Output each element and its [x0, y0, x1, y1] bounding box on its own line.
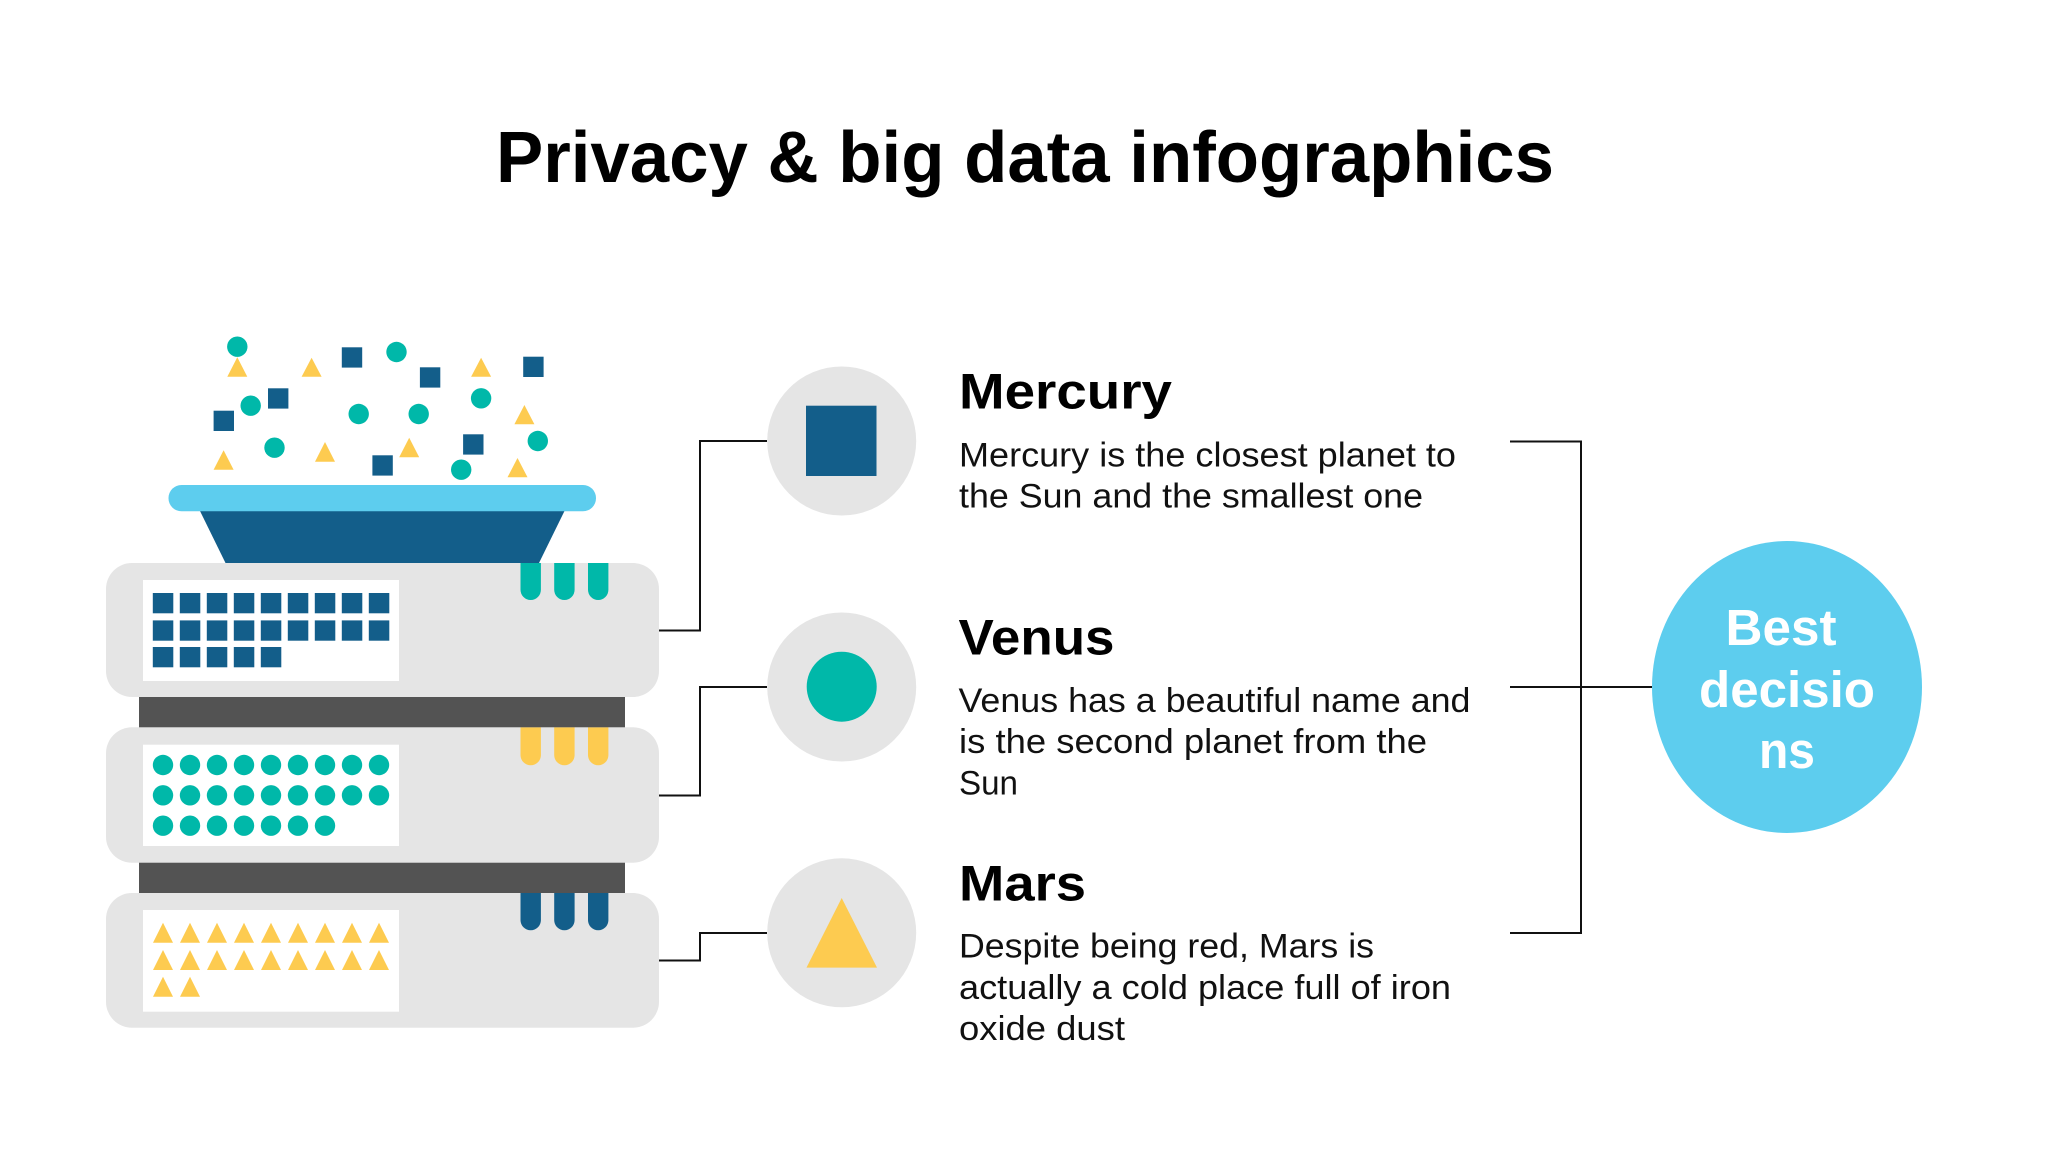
server 2 screen: [143, 745, 399, 846]
title: Privacy & big data infographics: [496, 118, 1554, 198]
text block: Mercury: [959, 364, 1456, 516]
icon: Mars triangle: [767, 858, 916, 1007]
funnel rim: [168, 485, 596, 511]
connector: server 3 to Mars: [659, 933, 767, 960]
description: Venus: Sun: [959, 764, 1018, 802]
teal circles: [227, 336, 548, 480]
connector: server 1 to Mercury: [659, 441, 767, 630]
callout: Best decisions: decisio: [1699, 661, 1875, 718]
description: Mars: [959, 928, 1451, 1048]
description: Venus: [958, 682, 1470, 802]
falling data particles: [214, 336, 548, 480]
description: Mars: Despite being red, Mars is: [959, 928, 1374, 966]
server 3 screen: [143, 910, 399, 1012]
description: Venus: is the second planet from the: [959, 723, 1427, 761]
server 1 teal pegs: [520, 563, 608, 600]
server unit 1: [106, 563, 659, 697]
server unit 3: [106, 893, 659, 1028]
server 3 body: [106, 893, 659, 1028]
description: Venus: Venus has a beautiful name and: [958, 682, 1470, 720]
connector: server 2 to Venus: [659, 687, 767, 796]
callout: Best decisions: ns: [1759, 722, 1815, 779]
dark separator bar 2: [139, 863, 625, 893]
callout: Best decisions: [1652, 541, 1922, 833]
illustration: server stack with funnel: [106, 336, 659, 1028]
heading: Mercury: Mercury: [959, 364, 1172, 420]
description: Mars: oxide dust: [959, 1010, 1125, 1048]
description: Mercury: Mercury is the closest planet to: [959, 436, 1456, 474]
icon: Venus circle: [767, 612, 916, 762]
server 3 triangles grid: [153, 923, 389, 997]
server 2 body: [106, 727, 659, 863]
server 2 circles grid: [153, 755, 389, 836]
blue squares: [214, 347, 544, 476]
server 3 blue pegs: [520, 893, 608, 930]
server 1 squares grid: [153, 593, 389, 667]
server unit 2: [106, 727, 659, 863]
callout: Best decisions: Best: [1726, 599, 1837, 656]
text block: Mars: [959, 856, 1451, 1048]
dark separator bar 1: [139, 697, 625, 727]
icon: Mercury square: [767, 366, 916, 516]
heading: Mars: Mars: [959, 856, 1086, 912]
yellow triangles: [214, 357, 534, 477]
description: Mercury: [959, 436, 1456, 516]
server 2 yellow pegs: [520, 727, 608, 765]
heading: Venus: Venus: [958, 610, 1114, 666]
server 1 screen: [143, 580, 399, 681]
bracket connector to outcome: [1510, 442, 1652, 933]
description: Mercury: the Sun and the smallest one: [959, 478, 1423, 516]
funnel body: [200, 511, 564, 564]
text block: Venus: [958, 610, 1470, 802]
description: Mars: actually a cold place full of iron: [959, 969, 1451, 1007]
server 1 body: [106, 563, 659, 697]
